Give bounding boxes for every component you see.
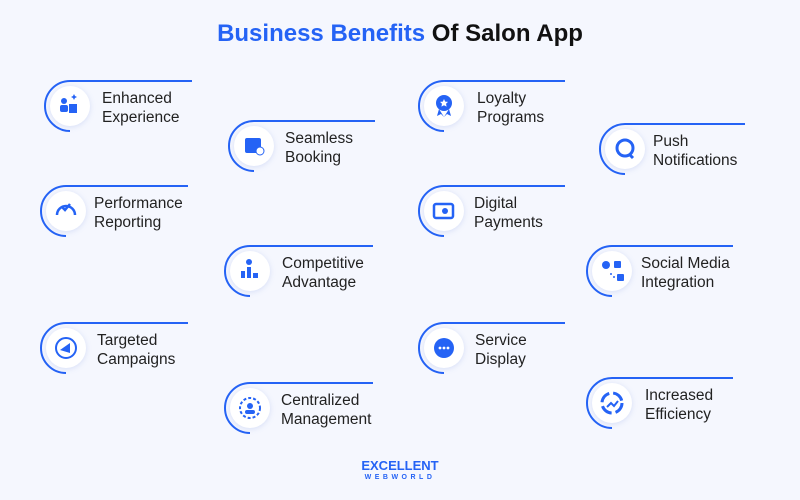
item: Performance Reporting: Reporting bbox=[94, 214, 161, 231]
item: Competitive Advantage: Advantage bbox=[282, 274, 356, 291]
item: Push Notifications: Notifications bbox=[653, 152, 737, 169]
logo bbox=[361, 458, 439, 481]
item: Targeted Campaigns: Targeted bbox=[97, 332, 157, 349]
item: Increased Efficiency: Increased bbox=[645, 387, 713, 404]
item: Social Media Integration: Integration bbox=[641, 274, 714, 291]
item: Targeted Campaigns: Campaigns bbox=[97, 351, 175, 368]
item: Loyalty Programs bbox=[418, 80, 565, 132]
item: Performance Reporting bbox=[40, 185, 188, 237]
item: Enhanced Experience: Experience bbox=[102, 109, 180, 126]
item: Service Display bbox=[418, 322, 565, 374]
item: Service Display: Display bbox=[475, 351, 526, 368]
item: Digital Payments: Payments bbox=[474, 214, 543, 231]
item: Loyalty Programs: Programs bbox=[477, 109, 544, 126]
item: Increased Efficiency bbox=[586, 377, 733, 429]
item: Loyalty Programs: Loyalty bbox=[477, 90, 526, 107]
logo: EXCELLENT bbox=[361, 458, 439, 473]
item: Push Notifications: Push bbox=[653, 133, 688, 150]
item: Seamless Booking: Seamless bbox=[285, 130, 353, 147]
item: Push Notifications bbox=[599, 123, 745, 175]
item: Targeted Campaigns bbox=[40, 322, 188, 374]
title: Business Benefits Of Salon App bbox=[217, 20, 583, 47]
item: Social Media Integration bbox=[586, 245, 733, 297]
item: Performance Reporting: Performance bbox=[94, 195, 183, 212]
item: Centralized Management bbox=[224, 382, 373, 434]
item: Digital Payments: Digital bbox=[474, 195, 517, 212]
item: Centralized Management: Management bbox=[281, 411, 371, 428]
item: Competitive Advantage: Competitive bbox=[282, 255, 364, 272]
item: Social Media Integration: Social Media bbox=[641, 255, 730, 272]
item: Digital Payments bbox=[418, 185, 565, 237]
logo: WEBWORLD bbox=[365, 474, 435, 481]
item: Seamless Booking bbox=[228, 120, 375, 172]
item: Enhanced Experience bbox=[44, 80, 192, 132]
item: Centralized Management: Centralized bbox=[281, 392, 359, 409]
item: Seamless Booking: Booking bbox=[285, 149, 341, 166]
item: Enhanced Experience: Enhanced bbox=[102, 90, 172, 107]
item: Competitive Advantage bbox=[224, 245, 373, 297]
item: Service Display: Service bbox=[475, 332, 527, 349]
item: Increased Efficiency: Efficiency bbox=[645, 406, 711, 423]
